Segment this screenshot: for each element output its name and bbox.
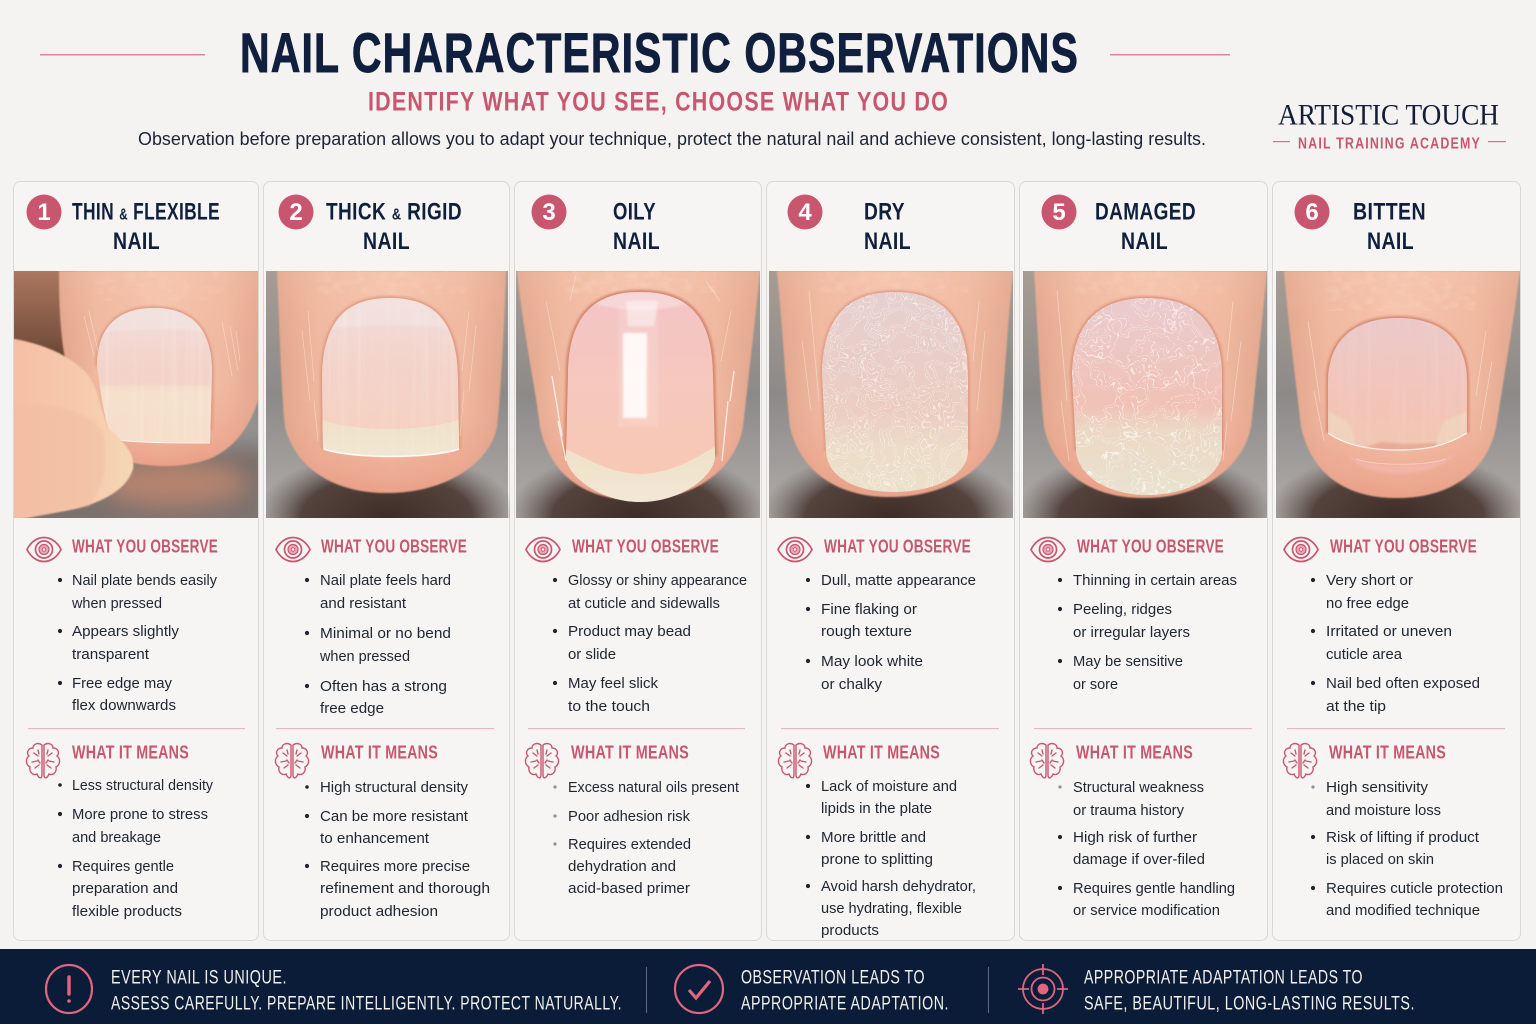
footer banner xyxy=(0,949,1536,1024)
photo: thick nail xyxy=(266,271,510,518)
heading: 4 xyxy=(798,199,812,226)
means heading: WHAT IT MEANS xyxy=(571,742,689,762)
heading: 6 xyxy=(1305,199,1319,226)
observe list: Glossy or shiny appearance xyxy=(568,572,747,589)
means list: preparation and xyxy=(72,880,178,897)
observe heading: WHAT YOU OBSERVE xyxy=(1330,536,1477,556)
observe list: rough texture xyxy=(821,623,912,640)
panel: dry nail xyxy=(759,182,1023,940)
means list: dehydration and xyxy=(568,858,676,875)
heading xyxy=(278,194,462,255)
means list: flexible products xyxy=(72,903,182,920)
observe heading: WHAT YOU OBSERVE xyxy=(572,536,719,556)
section: what it means xyxy=(1283,742,1503,919)
means list: use hydrating, flexible xyxy=(821,900,962,917)
observe list: Product may bead xyxy=(568,623,691,640)
means list xyxy=(1311,779,1503,919)
means list: Requires more precise xyxy=(320,858,470,875)
observe heading: WHAT YOU OBSERVE xyxy=(72,536,218,556)
observe list: free edge xyxy=(320,700,384,717)
means heading: WHAT IT MEANS xyxy=(823,742,940,762)
means list: Excess natural oils present xyxy=(568,779,740,796)
panel: thin and flexible nail xyxy=(4,182,274,940)
logo: Artistic Touch xyxy=(1273,98,1506,152)
means list: acid-based primer xyxy=(568,880,690,897)
observe list: Nail bed often exposed xyxy=(1326,675,1480,692)
observe list: Very short or xyxy=(1326,572,1413,589)
observe list: or slide xyxy=(568,646,616,663)
heading: BITTEN xyxy=(1353,198,1426,226)
footer message 2: APPROPRIATE ADAPTATION. xyxy=(741,994,949,1014)
section: what it means xyxy=(1030,742,1235,919)
means list: Can be more resistant xyxy=(320,808,469,825)
observe list: Thinning in certain areas xyxy=(1073,572,1237,589)
icon: eye xyxy=(27,538,61,562)
observe list: Often has a strong xyxy=(320,678,447,695)
subtitle: IDENTIFY WHAT YOU SEE, CHOOSE WHAT YOU DO xyxy=(368,86,949,116)
icon: eye xyxy=(526,538,560,562)
observe heading: WHAT YOU OBSERVE xyxy=(321,536,467,556)
photo: damaged nail xyxy=(1023,271,1267,518)
observe list: when pressed xyxy=(71,595,162,612)
means list: and breakage xyxy=(72,829,161,846)
observe list: to the touch xyxy=(568,698,650,715)
heading: 2 xyxy=(289,199,303,226)
observe list xyxy=(58,572,217,714)
means list: prone to splitting xyxy=(821,851,933,868)
observe list: Dull, matte appearance xyxy=(821,572,976,589)
observe list: Free edge may xyxy=(72,675,172,692)
intro text: Observation before preparation allows you to adapt your technique, protect the natural nail and achieve consistent, long-lasting results. xyxy=(138,129,1206,149)
header xyxy=(40,21,1230,149)
observe heading: WHAT YOU OBSERVE xyxy=(1077,536,1224,556)
means list: Requires cuticle protection xyxy=(1326,880,1503,897)
section: what it means xyxy=(26,742,213,920)
observe list: at cuticle and sidewalls xyxy=(568,595,720,612)
icon: brain xyxy=(275,744,309,778)
heading: 1 xyxy=(37,199,51,226)
section: what it means xyxy=(275,742,490,920)
icon: eye xyxy=(276,538,310,562)
observe list: Minimal or no bend xyxy=(320,625,451,642)
icon: eye xyxy=(1284,538,1318,562)
observe list: May feel slick xyxy=(568,675,658,692)
means list: More prone to stress xyxy=(72,806,208,823)
footer message 1 xyxy=(111,968,622,1014)
observe list: May be sensitive xyxy=(1073,653,1183,670)
title: NAIL CHARACTERISTIC OBSERVATIONS xyxy=(240,21,1079,84)
logo: Artistic Touch: ARTISTIC TOUCH xyxy=(1278,98,1499,132)
means list: High structural density xyxy=(320,779,468,796)
means list: is placed on skin xyxy=(1326,851,1434,868)
means list: High risk of further xyxy=(1073,829,1197,846)
means list xyxy=(305,779,490,920)
heading: THICK & RIGID xyxy=(326,198,462,226)
observe list: no free edge xyxy=(1326,595,1409,612)
observe list: Nail plate bends easily xyxy=(72,572,217,589)
observe list xyxy=(305,572,451,717)
observe list: transparent xyxy=(72,646,150,663)
icon: target xyxy=(1018,964,1068,1014)
section: what you observe xyxy=(276,536,467,717)
observe list: cuticle area xyxy=(1326,646,1403,663)
heading: NAIL xyxy=(363,228,410,255)
logo: Artistic Touch: NAIL TRAINING ACADEMY xyxy=(1298,135,1481,152)
heading xyxy=(532,194,660,255)
means list: Requires extended xyxy=(568,836,691,853)
icon: brain xyxy=(1283,744,1317,778)
means list xyxy=(553,779,740,897)
means list: Avoid harsh dehydrator, xyxy=(821,878,976,895)
observe list: and resistant xyxy=(320,595,407,612)
observe list: Fine flaking or xyxy=(821,601,917,618)
observe list xyxy=(1311,572,1480,715)
observe list: at the tip xyxy=(1326,698,1386,715)
icon: brain xyxy=(26,744,60,778)
panel: damaged nail xyxy=(1013,182,1277,940)
means list: refinement and thorough xyxy=(320,880,490,897)
observe list: flex downwards xyxy=(72,697,176,714)
observe list: May look white xyxy=(821,653,923,670)
photo: oily nail xyxy=(516,271,760,518)
heading xyxy=(1042,194,1196,255)
icon: brain xyxy=(525,744,559,778)
footer message 1: EVERY NAIL IS UNIQUE. xyxy=(111,968,287,988)
section: what you observe xyxy=(1031,536,1237,693)
observe list: Appears slightly xyxy=(72,623,180,640)
observe list: or irregular layers xyxy=(1073,624,1190,641)
footer message 3 xyxy=(1084,968,1415,1014)
heading xyxy=(1294,194,1426,255)
heading: DRY xyxy=(864,198,905,226)
photo: bitten nail xyxy=(1276,271,1520,518)
footer message 3: SAFE, BEAUTIFUL, LONG-LASTING RESULTS. xyxy=(1084,994,1415,1014)
means list: High sensitivity xyxy=(1326,779,1428,796)
means heading: WHAT IT MEANS xyxy=(72,742,189,762)
section: what you observe xyxy=(526,536,747,715)
footer message 2 xyxy=(741,968,949,1014)
means list: products xyxy=(821,922,879,939)
means list xyxy=(58,777,213,920)
footer message 2: OBSERVATION LEADS TO xyxy=(741,968,925,988)
observe list: when pressed xyxy=(319,648,410,665)
means list: Structural weakness xyxy=(1073,779,1204,796)
icon: eye xyxy=(1031,538,1065,562)
means heading: WHAT IT MEANS xyxy=(1329,742,1446,762)
panel: thick and rigid nail xyxy=(255,182,519,940)
heading: OILY xyxy=(613,198,656,226)
section: what you observe xyxy=(778,536,976,693)
heading: NAIL xyxy=(864,228,911,255)
observe heading: WHAT YOU OBSERVE xyxy=(824,536,971,556)
observe list: Irritated or uneven xyxy=(1326,623,1452,640)
photo: thin nail bent by thumb xyxy=(14,271,258,518)
heading: 3 xyxy=(542,199,556,226)
section: what you observe xyxy=(27,536,218,714)
panel: bitten nail xyxy=(1266,182,1530,940)
observe list: or chalky xyxy=(821,676,882,693)
icon: eye xyxy=(778,538,812,562)
means list: Risk of lifting if product xyxy=(1326,829,1480,846)
footer message 1: ASSESS CAREFULLY. PREPARE INTELLIGENTLY. PROTECT NATURALLY. xyxy=(111,994,622,1014)
icon: brain xyxy=(1030,744,1064,778)
means list: and moisture loss xyxy=(1326,802,1441,819)
heading: THIN & FLEXIBLE xyxy=(72,198,220,226)
footer message 3: APPROPRIATE ADAPTATION LEADS TO xyxy=(1084,968,1363,988)
observe list: Peeling, ridges xyxy=(1073,601,1172,618)
heading: DAMAGED xyxy=(1095,198,1196,226)
means list: and modified technique xyxy=(1326,902,1480,919)
means list: or trauma history xyxy=(1073,802,1184,819)
section: what it means xyxy=(778,742,976,939)
observe list xyxy=(806,572,976,693)
heading: 5 xyxy=(1052,199,1066,226)
observe list xyxy=(553,572,747,715)
icon: check mark xyxy=(675,965,723,1013)
means list: Poor adhesion risk xyxy=(568,808,690,825)
means heading: WHAT IT MEANS xyxy=(321,742,438,762)
means list: Lack of moisture and xyxy=(821,778,957,795)
means list: Requires gentle xyxy=(72,858,174,875)
heading xyxy=(788,194,911,255)
means list xyxy=(806,778,976,939)
means list: lipids in the plate xyxy=(821,800,932,817)
means list: to enhancement xyxy=(320,830,430,847)
means list: More brittle and xyxy=(821,829,926,846)
heading: NAIL xyxy=(1367,228,1414,255)
photo: dry nail xyxy=(769,271,1013,518)
icon: brain xyxy=(778,744,812,778)
section: what it means xyxy=(525,742,740,897)
means heading: WHAT IT MEANS xyxy=(1076,742,1193,762)
heading: NAIL xyxy=(613,228,660,255)
heading: NAIL xyxy=(113,228,160,255)
observe list: or sore xyxy=(1073,676,1118,693)
panel: oily nail xyxy=(506,182,770,940)
means list: product adhesion xyxy=(320,903,438,920)
means list xyxy=(1058,779,1235,919)
observe list: Nail plate feels hard xyxy=(320,572,451,589)
observe list xyxy=(1058,572,1237,693)
heading: NAIL xyxy=(1121,228,1168,255)
means list: Requires gentle handling xyxy=(1073,880,1235,897)
heading xyxy=(26,194,220,255)
means list: Less structural density xyxy=(72,777,213,794)
section: what you observe xyxy=(1284,536,1480,715)
icon: exclamation xyxy=(46,965,92,1013)
means list: or service modification xyxy=(1073,902,1220,919)
means list: damage if over-filed xyxy=(1073,851,1205,868)
